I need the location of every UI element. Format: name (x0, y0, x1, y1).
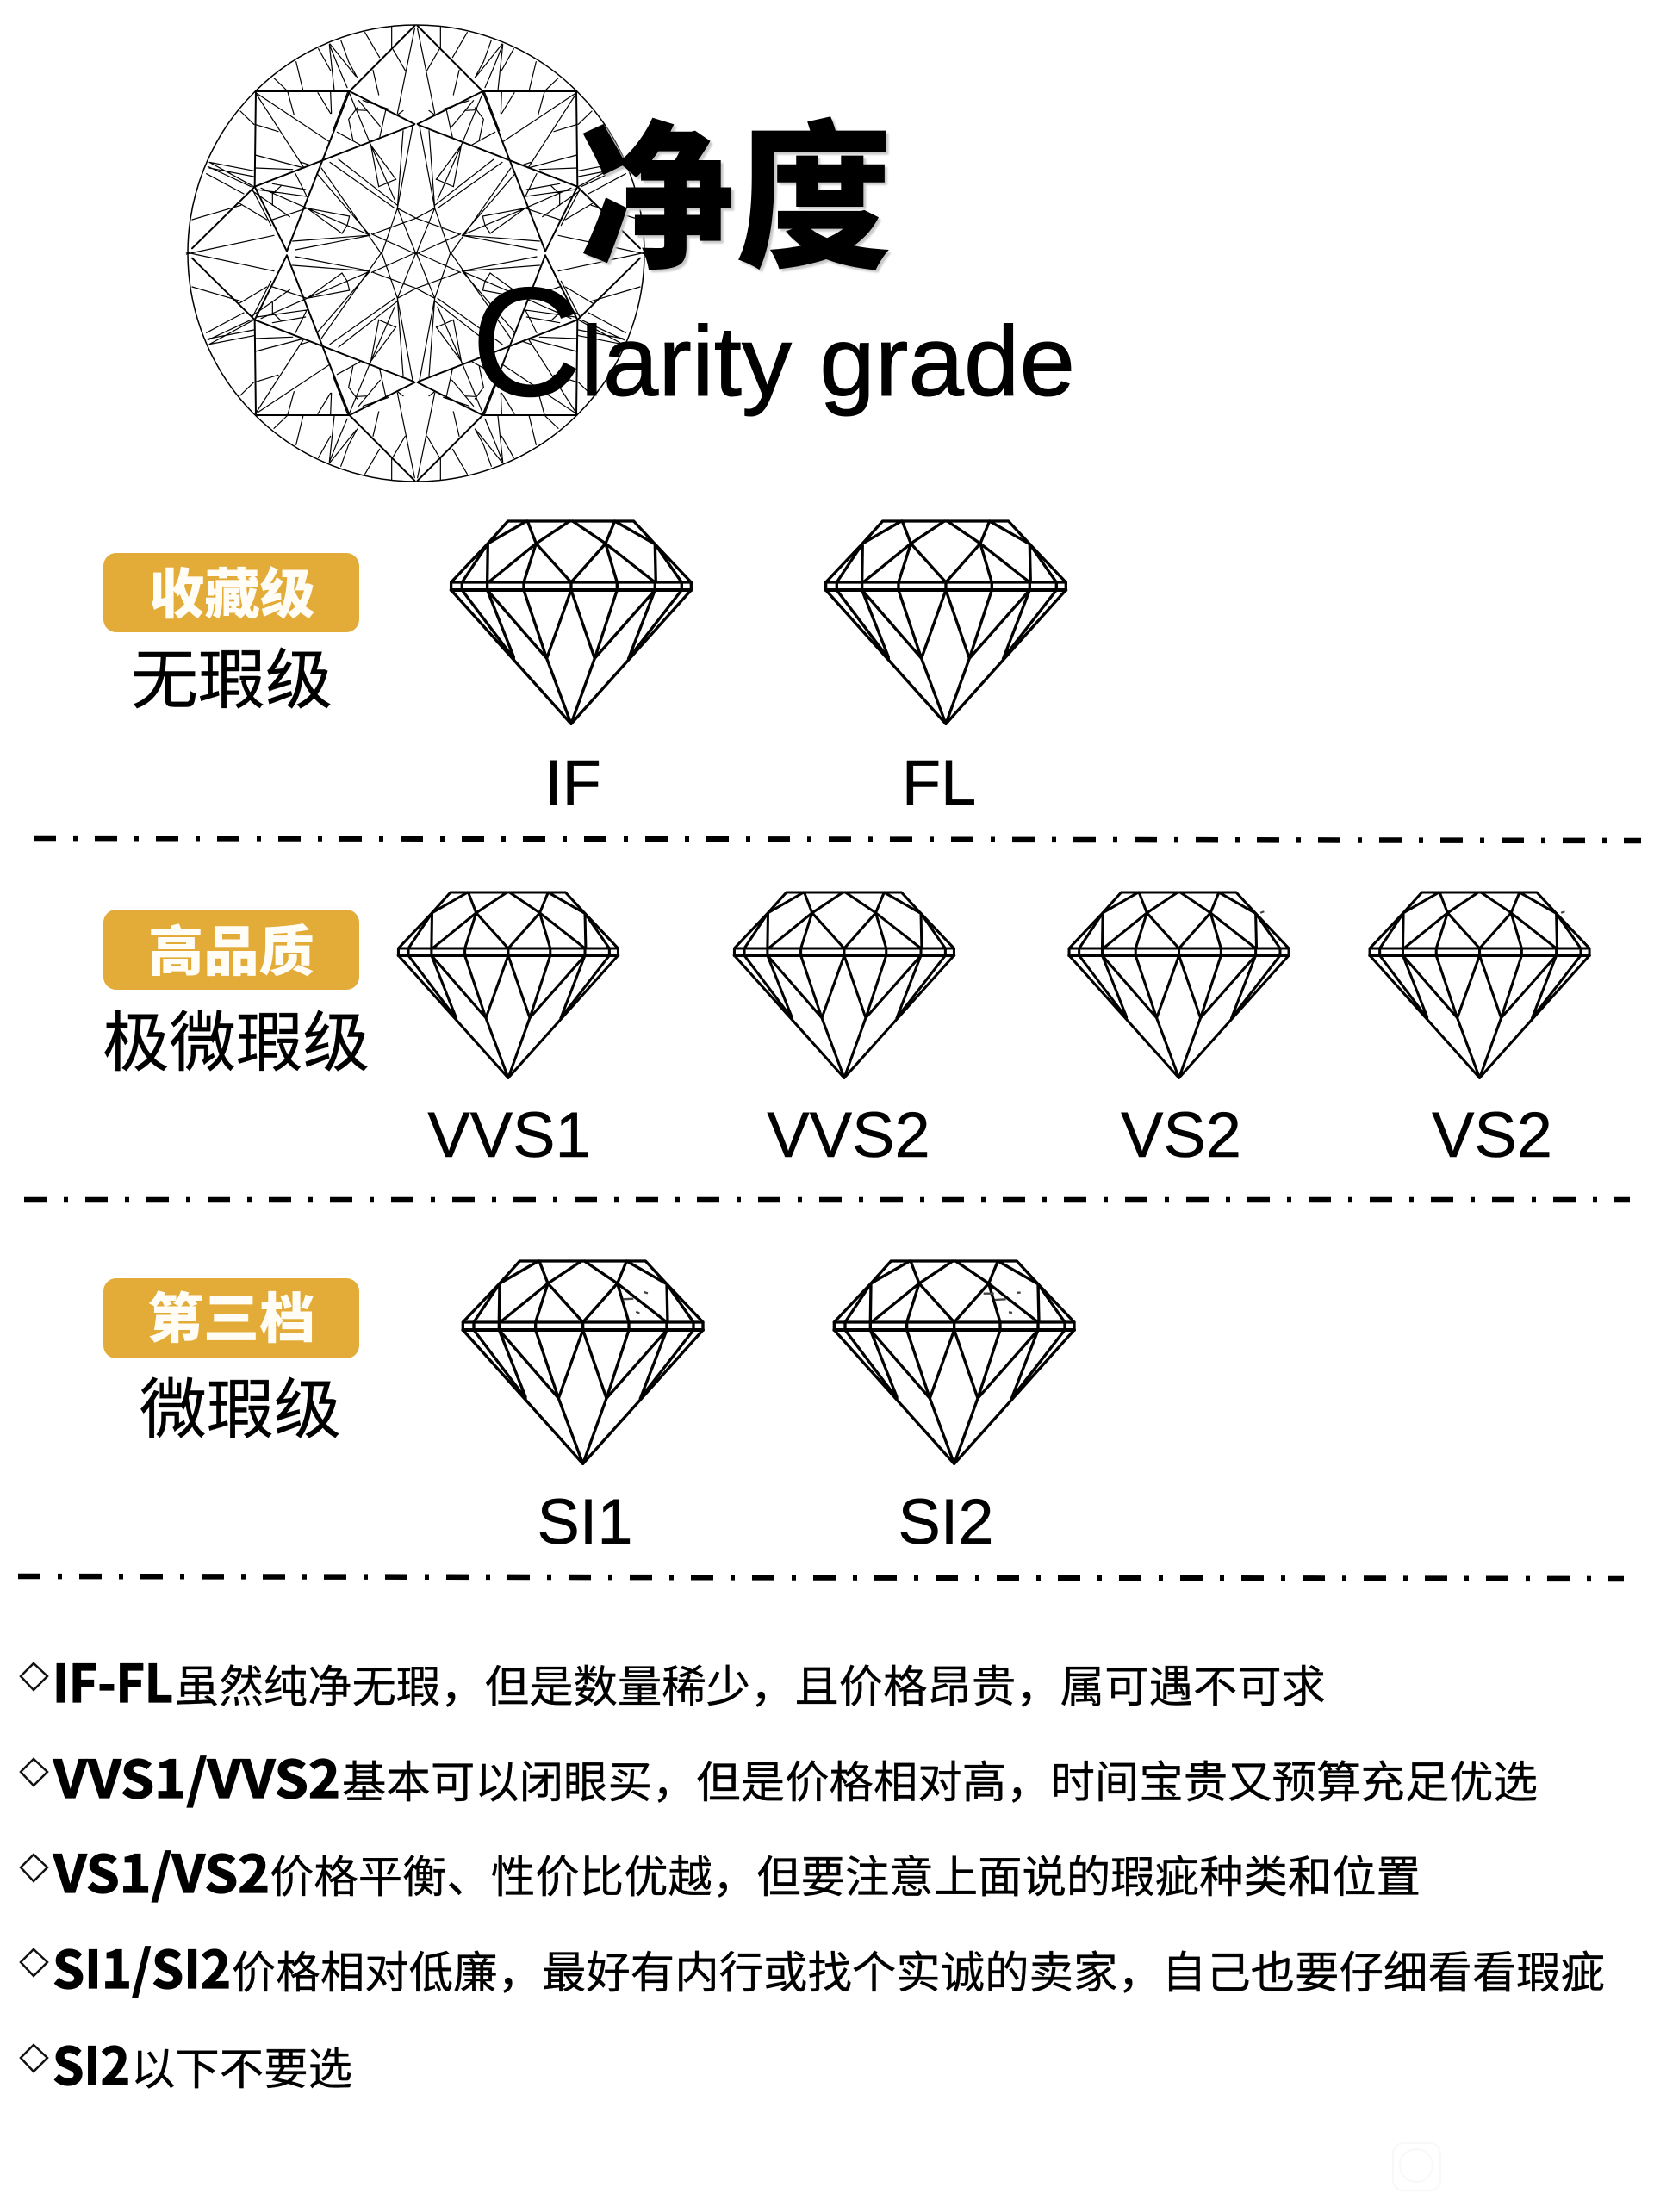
subtitle: Clarity grade: C (471, 256, 581, 429)
panel: very slightly included tier (103, 892, 1589, 1171)
label SI1: SI1 (537, 1486, 633, 1557)
tier name: 极微瑕级: 极微瑕级 (103, 990, 370, 1084)
badge: 第三档 (103, 1276, 359, 1358)
note 2: VVS1/VVS2 (53, 1738, 340, 1813)
note 5 (21, 2025, 352, 2100)
note 2: 基本可以闭眼买，但是价格相对高，时间宝贵又预算充足优选 (342, 1746, 1538, 1811)
note 5: 以下不要选 (131, 2033, 352, 2097)
diamond SI1 (463, 1261, 703, 1463)
note 4: 价格相对低廉，最好有内行或找个实诚的卖家，自己也要仔细看看瑕疵 (232, 1936, 1605, 2001)
note 3: 价格平衡、性价比优越，但要注意上面说的瑕疵种类和位置 (270, 1841, 1421, 1905)
diamond SI2 (834, 1261, 1074, 1463)
label VVS1: VVS1 (427, 1099, 591, 1171)
subtitle: Clarity grade (471, 256, 1075, 429)
label FL: FL (902, 747, 976, 818)
diamond VVS1 (398, 892, 618, 1078)
diamond VS2 second (1370, 892, 1589, 1078)
badge: 高品质 (103, 909, 359, 990)
note 1: 虽然纯净无瑕，但是数量稀少，且价格昂贵，属可遇不可求 (175, 1650, 1326, 1715)
note 4: SI1/SI2 (53, 1929, 231, 2004)
badge: 高品质: 高品质 (148, 909, 314, 987)
panel: slightly included tier (103, 1261, 1074, 1557)
notes list (21, 1643, 1605, 2100)
note 5: SI2 (53, 2025, 130, 2100)
tier name: 无瑕级: 无瑕级 (131, 627, 333, 722)
label VS2 second: VS2 (1432, 1099, 1552, 1171)
note 2 (21, 1738, 1538, 1813)
subtitle: Clarity grade: larity grade (581, 307, 1075, 417)
diamond FL (826, 521, 1066, 724)
note 1: IF-FL (53, 1643, 173, 1718)
label SI2: SI2 (898, 1486, 994, 1557)
badge: 收藏级 (103, 551, 359, 632)
badge: 收藏级: 收藏级 (149, 551, 315, 630)
diamond top-view facet diagram (186, 25, 646, 482)
label IF: IF (544, 747, 601, 818)
faint watermark (1393, 2143, 1440, 2190)
title: 净度: 净度 (579, 69, 892, 301)
label VS2: VS2 (1121, 1099, 1241, 1171)
diamond VS2 (1069, 892, 1289, 1078)
note 3: VS1/VS2 (53, 1833, 270, 1908)
label VVS2: VVS2 (767, 1099, 930, 1171)
badge: 第三档: 第三档 (147, 1276, 315, 1354)
tier name: 微瑕级: 微瑕级 (140, 1357, 341, 1451)
diamond IF (451, 521, 691, 724)
diamond VVS2 (734, 892, 954, 1078)
panel: flawless tier (103, 521, 1066, 818)
